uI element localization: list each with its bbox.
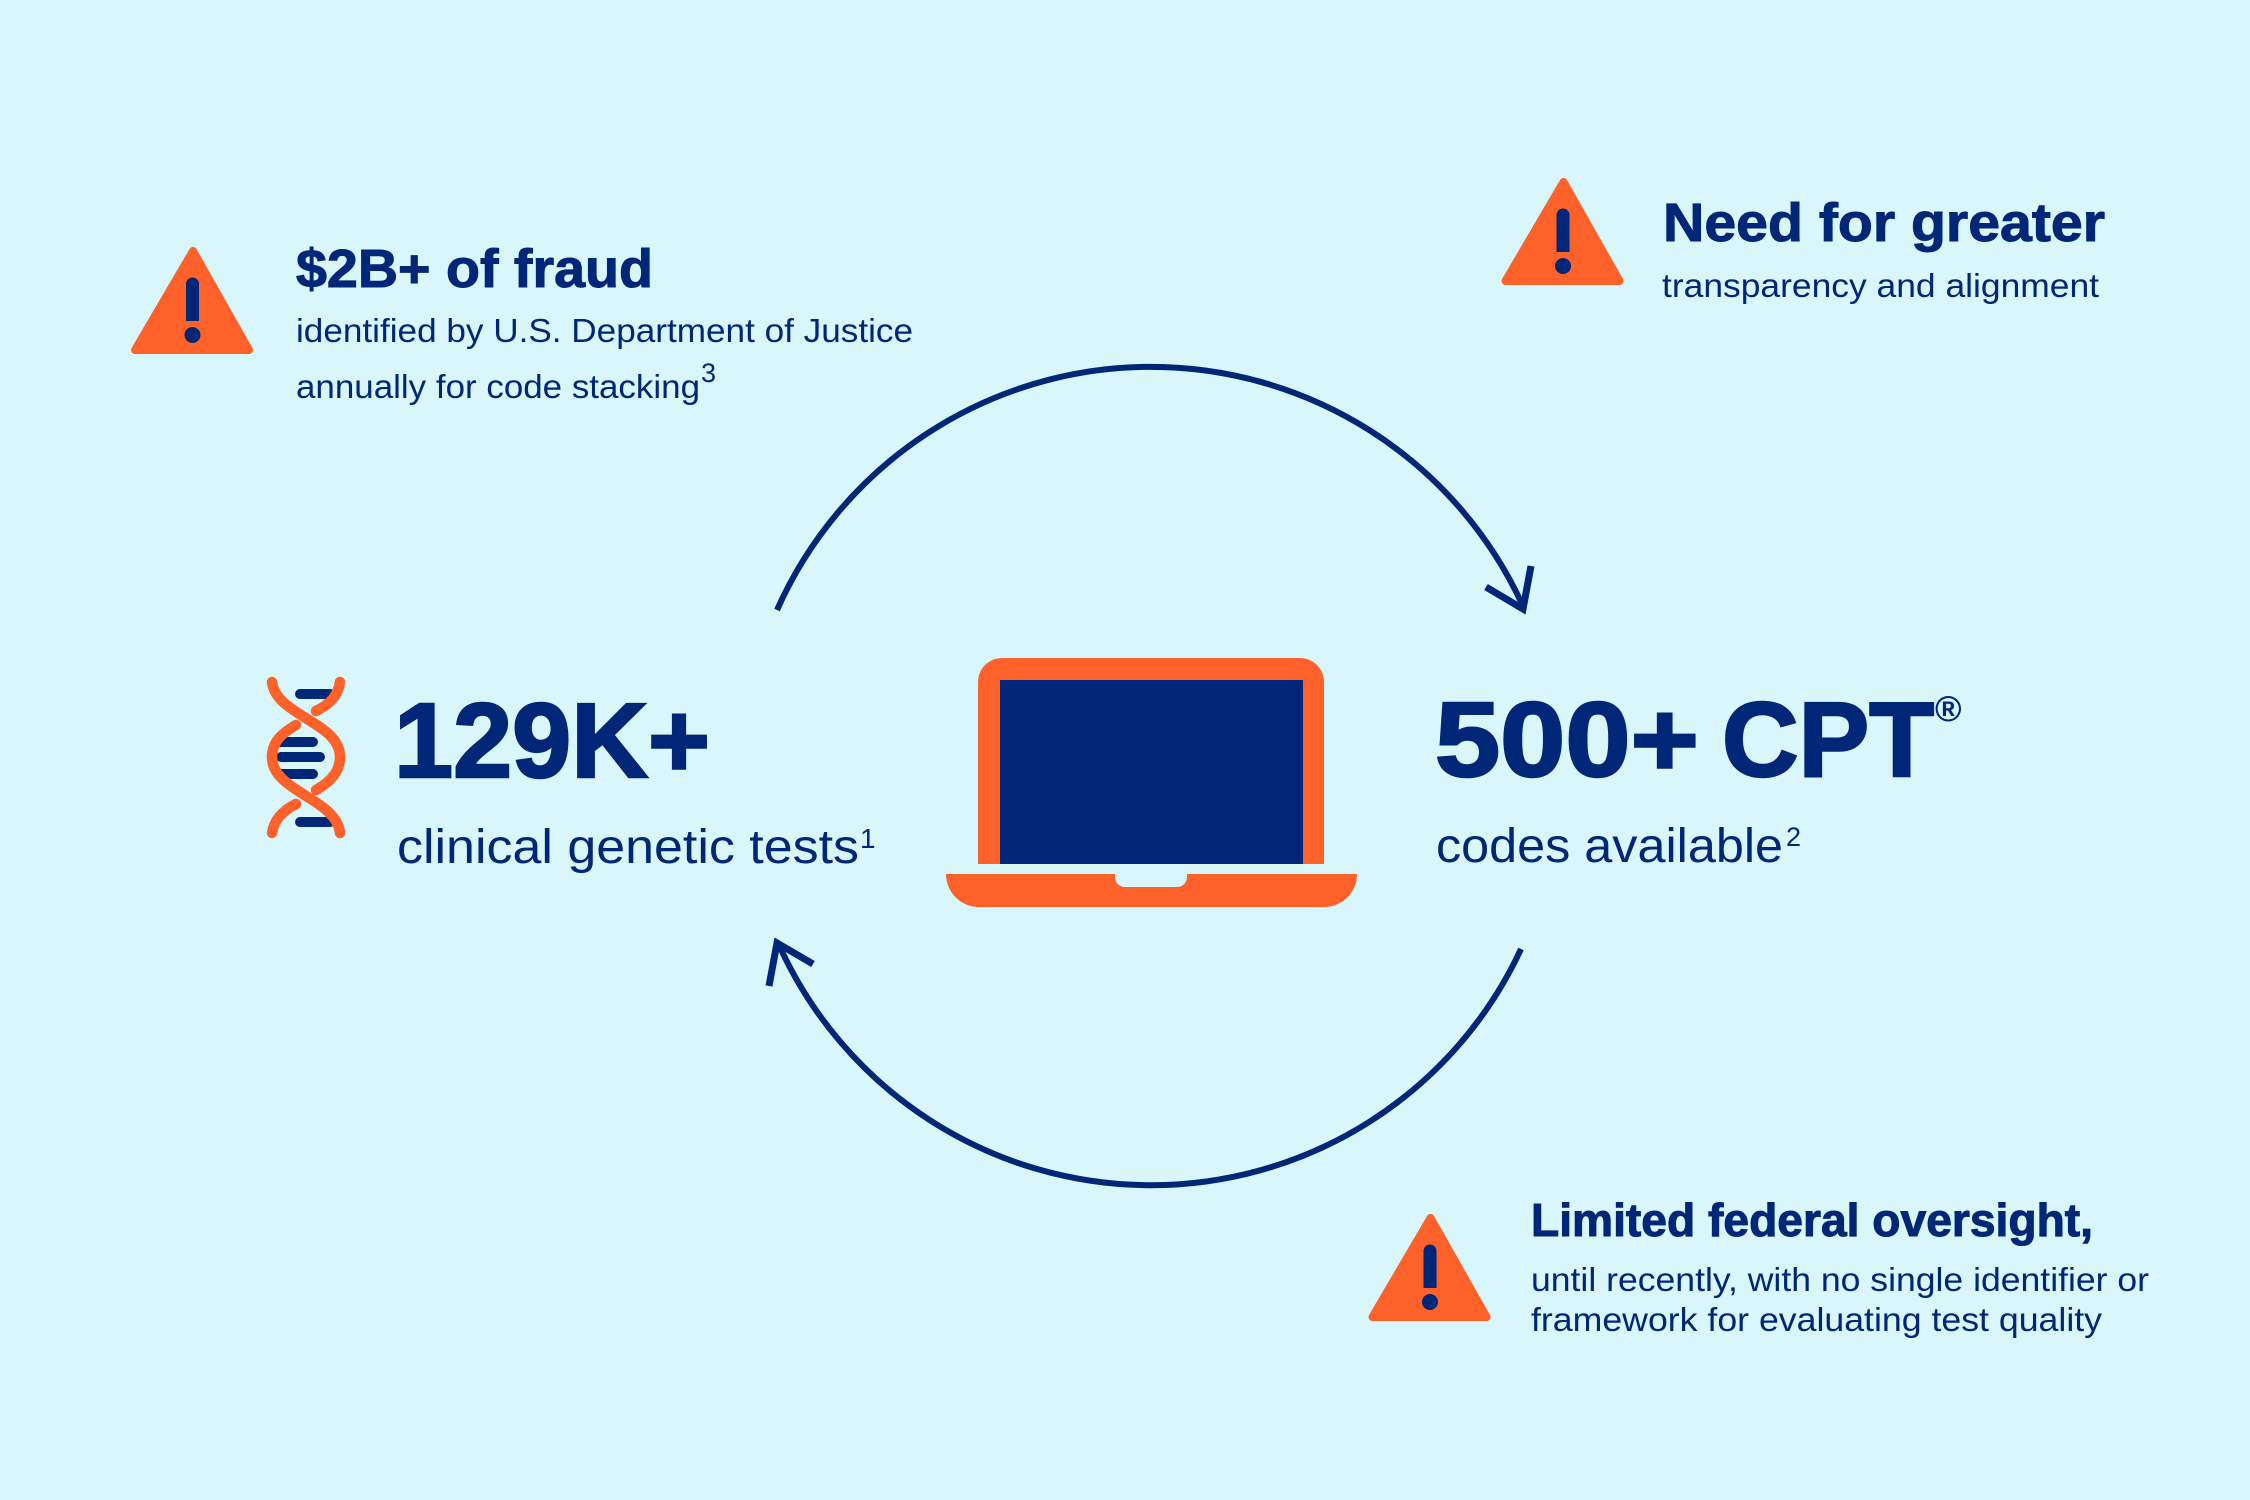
heading: Need for greater	[1663, 193, 2105, 253]
arrow: top arc, clockwise toward CPT codes	[777, 367, 1531, 610]
icon: warning triangle	[1506, 182, 1620, 281]
stat number: CPT: CPT	[1722, 681, 1934, 799]
icon: laptop	[946, 658, 1357, 907]
body line 2: annually for code stacking	[296, 368, 700, 405]
icon: warning triangle	[135, 251, 249, 350]
footnote marker 3: 3	[701, 358, 716, 388]
stat label: codes available: codes available	[1436, 820, 1783, 873]
stat number: 500+: 500+	[1435, 681, 1699, 799]
footnote marker 2: 2	[1786, 822, 1801, 852]
stat: 129K+ clinical genetic tests	[394, 682, 876, 874]
icon: warning triangle	[1372, 1218, 1486, 1317]
footnote marker 1: 1	[860, 823, 876, 854]
stat label: clinical genetic tests: clinical genetic tests	[397, 821, 859, 874]
heading: Limited federal oversight,	[1531, 1194, 2093, 1246]
body line 1: until recently, with no single identifier or	[1531, 1261, 2149, 1298]
body line 2: framework for evaluating test quality	[1531, 1301, 2103, 1338]
registered mark: ®	[1935, 688, 1962, 729]
body line 1: identified by U.S. Department of Justice	[296, 312, 913, 349]
heading: $2B+ of fraud	[296, 239, 653, 299]
stat number: 129K+: 129K+	[394, 682, 710, 800]
callout: need for greater transparency	[1506, 182, 2105, 304]
callout: $2B+ of fraud	[135, 239, 913, 405]
body line: transparency and alignment	[1662, 267, 2099, 304]
arrow: bottom arc, clockwise toward genetic tests	[769, 943, 1521, 1185]
icon: DNA helix	[272, 682, 340, 833]
callout: limited federal oversight	[1372, 1194, 2149, 1338]
stat: 500+ CPT codes available	[1435, 681, 1962, 873]
